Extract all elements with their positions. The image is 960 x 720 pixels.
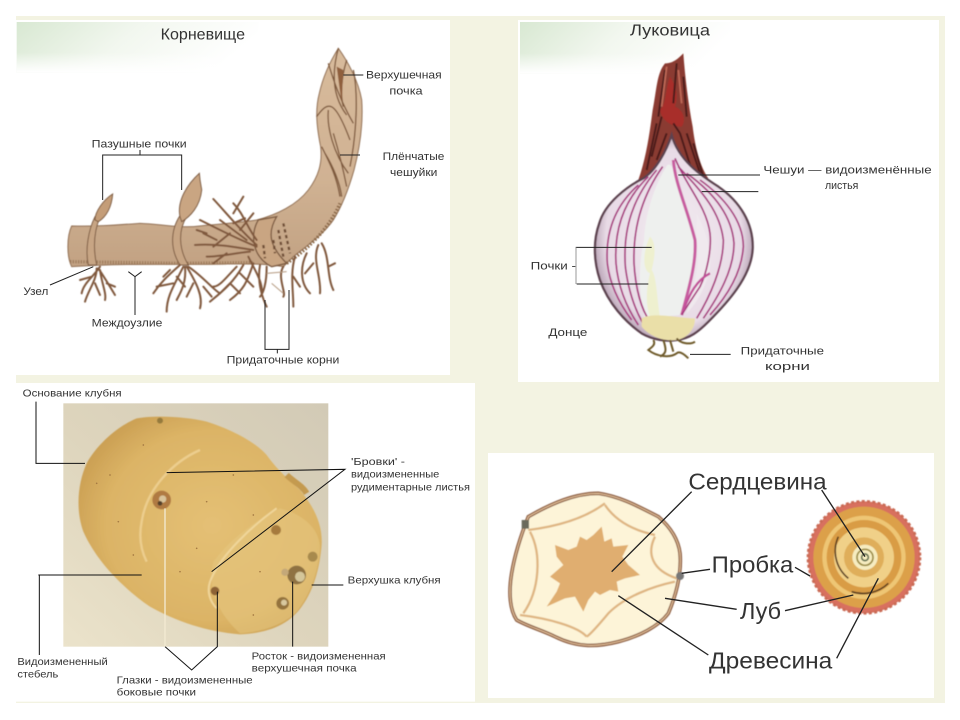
labels: potato: рудиментарные листья xyxy=(351,483,470,494)
labels: rhizome xyxy=(23,70,444,366)
labels: potato: Верхушка клубня xyxy=(348,574,441,586)
label lines: potato xyxy=(36,402,345,670)
labels: potato: Росток - видоизмененная xyxy=(252,651,386,662)
label lines: rhizome xyxy=(50,75,363,353)
labels: potato: Видоизмененный xyxy=(17,657,108,668)
labels: rhizome: Верхушечная xyxy=(366,70,442,82)
labels: cross-sections: Сердцевина xyxy=(688,468,827,494)
labels: potato xyxy=(17,388,470,699)
panel: rhizome xyxy=(16,20,450,375)
labels: rhizome: Придаточные корни xyxy=(227,354,339,366)
potato illustration xyxy=(79,417,322,634)
labels: bulb: корни xyxy=(765,361,810,373)
left cross-section xyxy=(510,493,920,645)
label lines: cross-sections xyxy=(612,490,878,658)
label lines: bulb xyxy=(576,175,760,354)
labels: bulb: Донце xyxy=(548,327,587,339)
labels: potato: стебель xyxy=(17,669,58,681)
panel: potato tuber xyxy=(16,383,475,702)
panel: root tuber cross-sections xyxy=(488,453,934,698)
labels: potato: верхушечная почка xyxy=(252,664,357,675)
labels: rhizome: Междоузлие xyxy=(92,318,162,330)
labels: potato: видоизмененные xyxy=(351,470,440,481)
labels: cross-sections: Пробка xyxy=(712,552,793,578)
title: bulb: Луковица xyxy=(630,23,710,40)
labels: potato: боковые почки xyxy=(117,687,196,699)
right cross-section xyxy=(808,501,920,613)
labels: bulb: Чешуи — видоизменённые xyxy=(763,164,932,176)
labels: cross-sections: Древесина xyxy=(709,647,832,673)
labels: bulb: Почки - xyxy=(531,260,576,272)
labels: potato: 'Бровки' - xyxy=(351,457,405,468)
labels: rhizome: Плёнчатые xyxy=(383,151,444,163)
potato photo background xyxy=(63,403,328,647)
onion illustration xyxy=(595,53,753,358)
rhizome illustration xyxy=(68,48,362,312)
labels: bulb: листья xyxy=(825,180,858,192)
labels: potato: Глазки - видоизмененные xyxy=(117,675,253,686)
labels: potato: Основание клубня xyxy=(23,388,122,400)
title: rhizome: Корневище xyxy=(161,26,245,43)
labels: cross-sections xyxy=(688,468,832,673)
speckles xyxy=(96,444,261,616)
labels: rhizome: почка xyxy=(389,86,424,98)
labels: rhizome: Узел xyxy=(23,286,48,298)
labels: rhizome: Пазушные почки xyxy=(92,138,187,150)
labels: cross-sections: Луб xyxy=(740,598,781,624)
labels: bulb: Придаточные xyxy=(741,345,824,357)
labels: bulb xyxy=(531,164,932,373)
panel: bulb xyxy=(518,20,939,382)
labels: rhizome: чешуйки xyxy=(390,167,437,179)
